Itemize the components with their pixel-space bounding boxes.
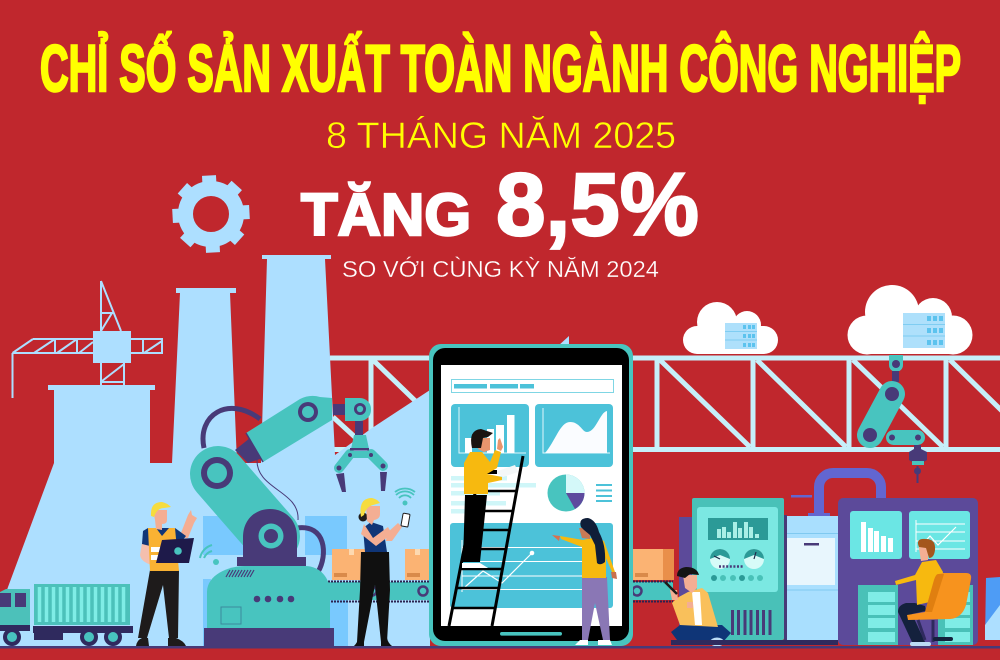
machine: control cabinet — [838, 498, 978, 645]
cloud right — [848, 285, 972, 354]
machine: pipe — [791, 473, 881, 516]
icon: wifi right — [395, 488, 415, 506]
factory background boxes — [203, 516, 348, 647]
subtitle: period: 8 THÁNG NĂM 2025 — [326, 115, 676, 156]
pie chart — [548, 474, 584, 512]
icon: gear — [171, 174, 251, 254]
person on ladder — [462, 429, 518, 568]
truck — [0, 584, 133, 646]
truss — [330, 358, 1000, 450]
comparison note: SO VỚI CÙNG KỲ NĂM 2024 — [342, 256, 659, 282]
robot arm — [201, 396, 387, 646]
seated operator — [895, 539, 971, 646]
ladder — [449, 456, 523, 626]
worker with laptop — [136, 502, 197, 646]
sitting person with phone — [665, 567, 731, 646]
cloud left — [683, 302, 778, 354]
factory silhouette — [0, 255, 569, 647]
crane — [12, 281, 162, 398]
conveyor right with box — [632, 549, 674, 602]
icon: wifi left — [200, 545, 219, 565]
ground line — [0, 640, 1000, 648]
conveyor left with boxes — [328, 549, 430, 602]
headline: value: 8,5% — [496, 154, 699, 254]
area chart tile — [535, 404, 613, 467]
machine: cabinet center — [787, 516, 838, 640]
document right edge — [985, 577, 1000, 640]
hanging robot arm — [863, 355, 927, 483]
person pointing — [552, 518, 617, 645]
worker with phone — [354, 498, 410, 646]
legend lines — [596, 485, 612, 501]
bar chart tile — [451, 404, 529, 467]
text lines — [451, 476, 536, 514]
search bar — [452, 380, 614, 392]
tablet — [429, 344, 633, 646]
headline: increase label: TĂNG — [301, 182, 471, 248]
machine: gauges panel — [679, 498, 787, 640]
line chart panel — [450, 523, 613, 608]
